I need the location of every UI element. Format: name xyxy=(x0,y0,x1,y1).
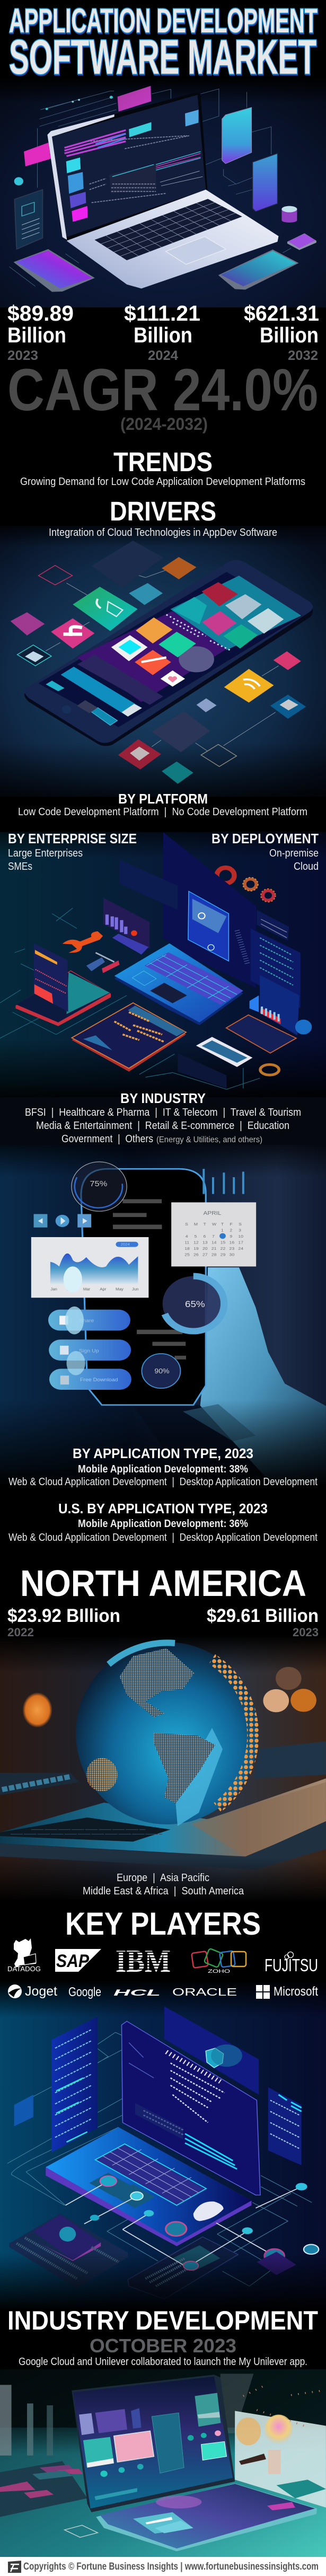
small phone xyxy=(196,1037,252,1067)
illustration: hand holding phone with holographic UI xyxy=(0,1097,326,1484)
regional stat 2022: 2022 xyxy=(7,1626,34,1639)
by industry: Government | Others xyxy=(61,1133,153,1145)
top right panel with shield xyxy=(164,2006,259,2095)
icon: computer mouse xyxy=(193,2201,224,2221)
panel: calendar: 9 xyxy=(230,1234,233,1239)
logo: Joget xyxy=(8,1984,57,1999)
by platform xyxy=(18,791,307,818)
panel: area chart: Feb xyxy=(67,1287,74,1291)
buttons: share, sign up, free download: Share xyxy=(79,1318,94,1324)
panel: calendar: 7 xyxy=(212,1234,215,1239)
icon: bottom-left tablet xyxy=(13,249,95,292)
stat: 2023 value: 2023 xyxy=(7,348,38,363)
icon: left dark phone xyxy=(14,190,42,249)
panel: calendar: 16 xyxy=(230,1240,235,1245)
right code panel xyxy=(268,2087,302,2165)
gears xyxy=(217,868,276,902)
hand xyxy=(133,1267,326,1482)
regional stat 2023 xyxy=(207,1605,319,1639)
illustration: isometric code laptop xyxy=(0,1980,326,2311)
stat: 2032 value: Billion xyxy=(260,323,319,347)
panel: calendar: 21 xyxy=(212,1246,217,1251)
panel: calendar: 15 xyxy=(221,1240,226,1245)
regional stat 2023: 2023 xyxy=(293,1626,319,1639)
panel: calendar: 17 xyxy=(238,1240,243,1245)
logo: Datadog xyxy=(7,1938,41,1973)
CAGR figure: (2024-2032) xyxy=(120,414,208,434)
panel: calendar: 14 xyxy=(212,1240,217,1245)
by enterprise size: Large Enterprises xyxy=(8,847,83,859)
blurred left tablet xyxy=(0,2461,87,2517)
logo: Microsoft: Microsoft xyxy=(274,1984,318,1999)
panel: calendar: 1 xyxy=(221,1228,224,1232)
panel: calendar: 20 xyxy=(202,1246,208,1251)
bars xyxy=(204,1169,243,1194)
U.S. by application type 2023: U.S. BY APPLICATION TYPE, 2023 xyxy=(58,1501,268,1516)
gauge 65% xyxy=(163,1276,224,1331)
icon: cyan circle xyxy=(14,177,23,186)
stat: 2032 value: $621.31 xyxy=(244,301,319,325)
panel: area chart: May xyxy=(116,1287,124,1291)
illustration: isometric devices and tools xyxy=(0,832,326,1097)
icon: floating magenta card xyxy=(118,86,151,111)
key players heading: KEY PLAYERS xyxy=(65,1906,261,1942)
right code panels xyxy=(251,910,301,1009)
panel: calendar: 18 xyxy=(184,1246,190,1251)
screen bars xyxy=(65,130,126,156)
by industry: BY INDUSTRY xyxy=(120,1090,206,1106)
floating app icons xyxy=(11,583,306,784)
logo: Datadog: DATADOG xyxy=(7,1965,41,1973)
panel: area chart: Jan xyxy=(50,1287,57,1291)
panel: calendar: F xyxy=(230,1222,233,1227)
gauge 65%: 65% xyxy=(185,1299,205,1309)
panel: calendar: W xyxy=(212,1222,216,1227)
stat: 2024 value: 2024 xyxy=(148,348,178,363)
laptop xyxy=(0,1778,326,1869)
panel: calendar: 29 xyxy=(221,1252,226,1257)
illustration: foldable tablet on desk xyxy=(0,2359,326,2557)
industry development xyxy=(7,2306,318,2368)
bottom-right tablet xyxy=(128,2237,238,2299)
globe xyxy=(76,1642,258,1826)
bokeh lights xyxy=(0,1667,326,1795)
title xyxy=(9,2,318,84)
drivers: Integration of Cloud Technologies in AppDev Software xyxy=(49,526,277,539)
city lights west xyxy=(86,1758,118,1792)
tablet screen xyxy=(72,2375,235,2512)
media buttons xyxy=(34,1214,91,1228)
other regions xyxy=(83,1872,244,1897)
by deployment: Cloud xyxy=(294,860,319,872)
panel: calendar: 4 xyxy=(186,1234,188,1239)
buttons: share, sign up, free download: Sign Up xyxy=(79,1348,99,1354)
stat: 2023 value: $89.89 xyxy=(7,301,74,325)
buttons: share, sign up, free download xyxy=(48,1307,131,1390)
other regions: Middle East & Africa | South America xyxy=(83,1885,244,1897)
stat: 2023 value: Billion xyxy=(7,323,66,347)
by deployment xyxy=(212,831,319,872)
logo: Fortune Business Insights mark xyxy=(8,2561,21,2573)
continent: North America xyxy=(119,1648,195,1717)
panel: calendar: 5 xyxy=(195,1234,197,1239)
panel: area chart: Jun xyxy=(132,1287,139,1291)
panel: calendar: 25 xyxy=(184,1252,190,1257)
panel: calendar: M xyxy=(194,1222,198,1227)
icon: small right phone xyxy=(252,153,278,211)
logo: SAP: SAP xyxy=(56,1951,89,1971)
by industry: (Energy & Utilities, and others) xyxy=(156,1135,262,1144)
stat: 2032 value xyxy=(244,301,319,363)
by platform: BY PLATFORM xyxy=(118,791,208,807)
by industry: Media & Entertainment | Retail & E-commerce | Education xyxy=(36,1119,289,1132)
regional stat 2022 xyxy=(7,1605,120,1639)
laptop xyxy=(114,943,243,1025)
laptop base xyxy=(46,2127,252,2246)
panel: calendar: 6 xyxy=(204,1234,206,1239)
logo row 1 xyxy=(7,1938,318,1979)
icon: screwdriver xyxy=(86,952,119,973)
panel: calendar: 26 xyxy=(193,1252,199,1257)
phone xyxy=(81,1169,206,1405)
app icons on phone screen xyxy=(111,582,284,686)
left code panel xyxy=(51,2017,98,2152)
U.S. by application type 2023: Mobile Application Development: 36% xyxy=(78,1518,248,1530)
small panel xyxy=(178,1053,226,1088)
left tablet xyxy=(15,943,111,1026)
stat: 2024 value: Billion xyxy=(134,323,192,347)
by enterprise size xyxy=(8,831,137,872)
gauge 90% xyxy=(142,1354,180,1388)
panel: calendar xyxy=(171,1202,256,1266)
panel: calendar: 11 xyxy=(184,1240,190,1245)
panel: calendar: 24 xyxy=(238,1246,243,1251)
icon: tall right phone xyxy=(222,108,252,164)
panel: calendar: 12 xyxy=(193,1240,199,1245)
trends xyxy=(20,447,305,488)
app icon: gear xyxy=(162,557,197,579)
panel: area chart xyxy=(31,1237,148,1298)
regional stat 2022: $23.92 BIllion xyxy=(7,1605,120,1626)
panel: calendar: T xyxy=(204,1222,206,1227)
logo: Google: Google xyxy=(68,1985,101,1999)
U.S. by application type 2023 xyxy=(8,1501,318,1543)
logo: Microsoft xyxy=(256,1984,318,1999)
gauge 75% xyxy=(72,1162,127,1211)
stat: 2023 value xyxy=(7,301,74,363)
panel: calendar: S xyxy=(185,1222,188,1227)
phone body xyxy=(24,560,313,746)
panel: calendar: 30 xyxy=(230,1252,235,1257)
continent: South America xyxy=(154,1733,215,1804)
by deployment: On-premise xyxy=(269,847,319,859)
chart panel xyxy=(103,898,149,955)
small left panel xyxy=(14,2095,33,2126)
illustration: smartphone with app icons xyxy=(0,526,326,797)
logo row 2 xyxy=(8,1984,318,1999)
laptop xyxy=(47,92,278,288)
icon: wrench xyxy=(63,931,103,953)
stat: 2032 value: 2032 xyxy=(288,348,318,363)
app card: document xyxy=(92,541,163,588)
by industry xyxy=(25,1090,301,1145)
panel: calendar: 10 xyxy=(238,1234,243,1239)
by application type 2023 xyxy=(8,1445,318,1488)
drivers xyxy=(49,496,277,539)
center tablet xyxy=(72,1003,186,1072)
icon: small purple chip xyxy=(287,233,316,250)
app icon: outline chip xyxy=(39,566,72,585)
gauge 75%: 75% xyxy=(90,1180,107,1188)
trends: TRENDS xyxy=(113,447,213,477)
illustration: hero laptop with devices xyxy=(0,77,326,307)
panel: calendar: 28 xyxy=(212,1252,217,1257)
right laptop xyxy=(226,975,312,1053)
industry development: OCTOBER 2023 xyxy=(90,2335,236,2357)
buttons: share, sign up, free download: Free Download xyxy=(80,1378,118,1383)
panel: calendar: 22 xyxy=(221,1246,226,1251)
icon: orange ring xyxy=(260,1064,279,1075)
logo: Zoho xyxy=(191,1948,246,1974)
panel: calendar: S xyxy=(239,1222,242,1227)
panel: calendar: T xyxy=(221,1222,224,1227)
icon: bottom-right phone xyxy=(218,250,299,289)
panel: calendar: 2 xyxy=(230,1228,233,1232)
sketch on desk xyxy=(65,2525,98,2537)
logo: HCL: HCL xyxy=(113,1988,161,1998)
monitor xyxy=(119,832,256,988)
bottom-left tablet xyxy=(10,2213,128,2288)
panel: area chart: Mar xyxy=(83,1287,91,1291)
gauge 90%: 90% xyxy=(154,1368,170,1375)
panel: calendar: 27 xyxy=(202,1252,208,1257)
blurred desk objects xyxy=(0,2374,326,2508)
panel: area chart: 2024 xyxy=(120,1242,130,1247)
logo: IBM: IBM xyxy=(116,1944,171,1979)
panel: calendar: APRIL xyxy=(204,1210,222,1216)
by enterprise size: SMEs xyxy=(8,860,32,872)
logo: Oracle: ORACLE xyxy=(172,1987,237,1998)
panel: calendar: 19 xyxy=(193,1246,199,1251)
logo: Zoho: ZOHO xyxy=(208,1969,230,1974)
panel: calendar: 23 xyxy=(230,1246,235,1251)
panel: calendar: 13 xyxy=(202,1240,208,1245)
footer xyxy=(0,2557,326,2576)
laptop screen xyxy=(121,2021,260,2195)
panel: calendar: 3 xyxy=(239,1228,241,1232)
glowing balloons xyxy=(236,2415,293,2474)
stat: 2024 value: $111.21 xyxy=(124,301,200,325)
icon: floating pink card xyxy=(24,142,53,166)
stat: 2024 value xyxy=(124,301,200,363)
logo: Joget: Joget xyxy=(25,1984,57,1999)
icon: cylinder xyxy=(281,206,297,223)
regional market title: NORTH AMERICA xyxy=(20,1563,306,1604)
by application type 2023: BY APPLICATION TYPE, 2023 xyxy=(73,1445,253,1461)
by enterprise size: BY ENTERPRISE SIZE xyxy=(8,831,137,846)
other regions: Europe | Asia Pacific xyxy=(117,1872,209,1884)
panel: area chart: Apr xyxy=(100,1287,107,1291)
regional stat 2023: $29.61 Billion xyxy=(207,1605,319,1626)
tablet base xyxy=(96,2483,317,2551)
drivers: DRIVERS xyxy=(110,496,216,526)
illustration: glowing globe on laptop xyxy=(0,1635,326,1903)
circuit connectors and nodes xyxy=(66,2176,319,2275)
by application type 2023: Mobile Application Development: 38% xyxy=(78,1463,248,1475)
